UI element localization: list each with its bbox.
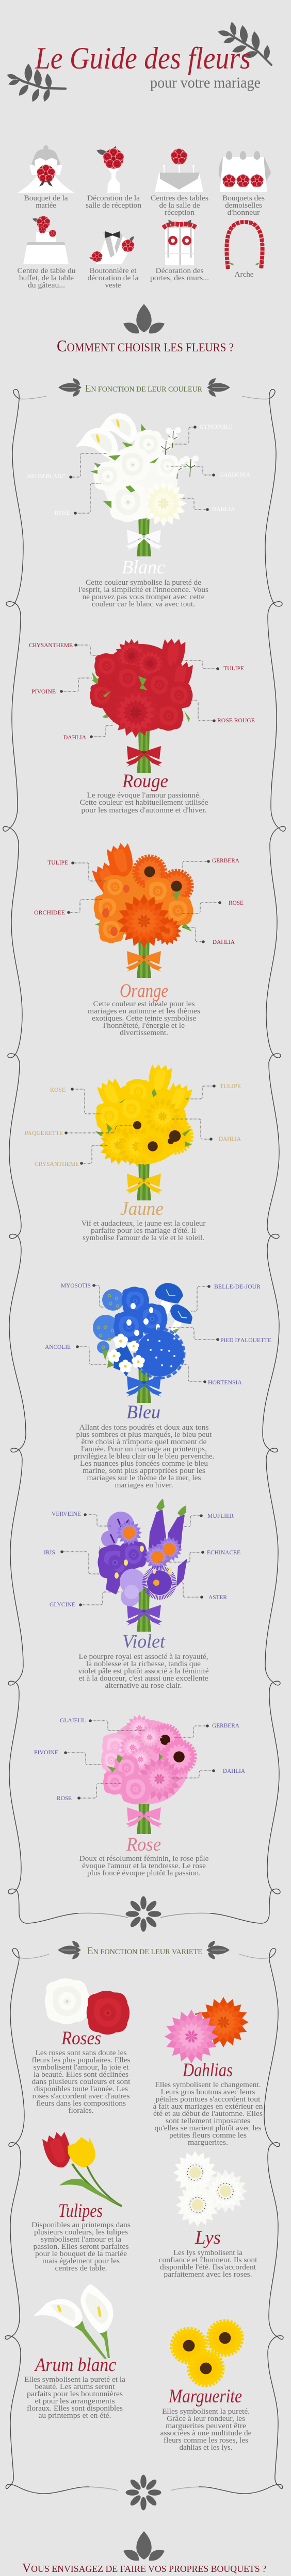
text: dahlias description: Elles symbolisent le changement. <box>155 2081 261 2089</box>
text: tulipes description: Disponibles au printemps dans <box>31 2221 131 2229</box>
text: roses description: symbolisent l'amour, la joie et <box>33 2063 129 2072</box>
label: glaieul: GLAIEUL <box>60 1718 86 1724</box>
caption: reception decoration: Décoration de la <box>87 194 140 202</box>
text: violet description <box>78 1653 208 1690</box>
text: bleu description: l'année. Pour un mariage au printemps, <box>81 1445 207 1453</box>
heading: how to choose: COMMENT CHOISIR LES FLEURS ? <box>57 336 234 355</box>
label: crysantheme: CRYSANTHEME <box>29 642 73 649</box>
text: marguerite description: Elles symbolisent la pureté. <box>162 2408 250 2416</box>
panel: arum blanc <box>24 2284 126 2420</box>
caption: table centrepiece: réception <box>165 209 195 217</box>
label: muflier <box>183 1513 234 1527</box>
label: gerbera <box>173 1723 240 1737</box>
text: jaune description: Vif et audacieux, le jaune est la couleur <box>82 1219 206 1228</box>
icon: blue bouquet drawing <box>93 1283 192 1403</box>
panel: marguerite <box>160 2319 252 2452</box>
label: muflier: MUFLIER <box>207 1513 234 1519</box>
icon: left leaf sprig <box>6 64 66 103</box>
decorative frame variety section left <box>5 1948 118 2494</box>
heading: rouge: Rouge <box>122 771 168 792</box>
label: tulipe: TULIPE <box>47 860 68 866</box>
text: lys description <box>159 2249 257 2279</box>
panel: yellow bouquet <box>25 1062 241 1242</box>
label: echinacee <box>158 1550 240 1562</box>
text: orange description: l'honnêteté, l'énergie et le <box>103 1022 185 1030</box>
panel: lys <box>159 2144 257 2279</box>
label: pivoine <box>34 1750 103 1765</box>
icon: white lilies <box>166 2144 254 2234</box>
text: orange description: Cette couleur est idéale pour les <box>93 1000 195 1008</box>
icon: right leaf sprig <box>217 21 271 65</box>
label: rose <box>182 900 244 913</box>
text: tulipes description <box>31 2221 131 2273</box>
label: gypsophile: GYPSOPHILE <box>200 424 232 430</box>
text: rouge description: Cette couleur est habituellement utilisée <box>79 799 208 807</box>
label: gerbera <box>183 858 240 872</box>
icon: left ornament variety <box>58 1941 81 1959</box>
icon: header leaves DIY <box>123 2531 165 2561</box>
caption: cake table: du gâteau... <box>28 281 65 290</box>
label: pivoine <box>31 678 92 695</box>
text: dahlias description <box>153 2081 263 2147</box>
text: dahlias description: sont tellement imposantes <box>166 2117 250 2125</box>
heading: DIY bouquets: VOUS ENVISAGEZ DE FAIRE VOS PROPRES BOUQUETS ? <box>22 2562 266 2575</box>
label: crysantheme: CRYSANTHEME <box>35 1161 79 1167</box>
label: pied d'alouette <box>169 1328 271 1344</box>
text: rose description: plus foncé évoque plutôt la passion. <box>87 1869 201 1877</box>
label: rose: ROSE <box>57 1795 72 1802</box>
text: bleu description <box>73 1423 214 1489</box>
icon: pink bouquet drawing <box>101 1710 197 1834</box>
text: bleu description: marine, sont plus appropriées pour les <box>83 1467 205 1475</box>
label: belle-de-jour: BELLE-DE-JOUR <box>214 1284 261 1290</box>
text: jaune description: symbolise l'amour de la vie et le soleil. <box>83 1234 204 1242</box>
caption: boutonniere and jacket <box>88 267 139 290</box>
label: tulipe: TULIPE <box>223 666 244 672</box>
panel: white bouquet <box>27 413 251 608</box>
caption: cake table <box>18 267 75 290</box>
text: tulipes description: plusieurs couleurs, les tulipes <box>34 2228 128 2236</box>
label: myosotis: MYOSOTIS <box>61 1283 91 1289</box>
caption: table centrepiece <box>151 194 208 217</box>
label: rose rouge <box>192 700 255 724</box>
text: dahlias description: été et au début de l'automne. Elles <box>153 2110 263 2118</box>
subheading: by variety: EN FONCTION DE LEUR VARIETE <box>87 1945 202 1957</box>
panel: red bouquet <box>29 634 255 815</box>
caption: bridesmaids bouquets <box>222 194 265 217</box>
text: lys description: Les lys symbolisent la <box>173 2249 243 2257</box>
text: dahlias description: marguerites. <box>188 2139 228 2147</box>
text: blanc description: ne pouvez pas vous tromper avec cette <box>83 593 204 601</box>
heading: lys: Lys <box>195 2227 221 2248</box>
text: marguerite description: associées à une multitude de <box>160 2429 252 2437</box>
caption: reception decoration <box>86 194 142 210</box>
label: rose: ROSE <box>55 510 70 516</box>
label: verveine <box>52 1511 111 1526</box>
icon: daisies <box>170 2319 244 2387</box>
caption: door decoration: Décoration des <box>156 267 204 275</box>
heading: arum blanc: Arum blanc <box>34 2354 117 2376</box>
heading: bleu: Bleu <box>126 1402 160 1423</box>
text: roses description: Les roses sont sans doute les <box>35 2049 127 2057</box>
text: orange description: exotiques. Cette teinte symbolise <box>92 1014 196 1023</box>
caption: cake table: Centre de table du <box>18 267 75 275</box>
label: iris: IRIS <box>44 1550 55 1556</box>
text: marguerite description <box>160 2408 252 2452</box>
panel: dahlias <box>153 1989 263 2147</box>
label: gardenia: GARDENIA <box>219 472 251 478</box>
caption: arch: Arche <box>234 270 254 279</box>
text: marguerite description: Grâce à leur rondeur, les <box>167 2415 245 2423</box>
icon: violet bouquet drawing <box>98 1499 187 1632</box>
caption: bride bouquet: Bouquet de la <box>24 194 68 202</box>
label: tulipe: TULIPE <box>220 1083 241 1090</box>
text: jaune description: parfaite pour les mariage d'été. Il <box>91 1227 196 1235</box>
decorative frame colour section left <box>3 389 128 1923</box>
label: dahlia: DAHLIA <box>213 939 235 945</box>
label: crysantheme <box>29 642 115 655</box>
label: glycine <box>50 1592 122 1608</box>
text: lys description: parfaitement avec les roses. <box>164 2270 252 2279</box>
label: crysantheme <box>35 1145 108 1167</box>
text: dahlias description: petites fleurs comme les <box>169 2131 247 2140</box>
label: paquerette <box>25 1126 133 1137</box>
text: dahlias description: qu'elles se marient plutôt avec les <box>155 2124 262 2132</box>
label: iris <box>44 1550 99 1574</box>
text: marguerite description: marguerites peuvent être <box>166 2422 246 2430</box>
panel: pink bouquet <box>34 1710 246 1877</box>
text: rose description: Doux et résolument féminin, le rose pâle <box>79 1855 208 1863</box>
caption: door decoration: portes, des murs... <box>150 274 209 282</box>
icon: white and red roses <box>45 1978 130 2035</box>
label: myosotis <box>61 1283 106 1307</box>
text: dahlias description: Leurs gros boutons avec leurs <box>161 2088 255 2096</box>
text: bleu description: Les nuances plus foncées comme le bleu <box>80 1460 208 1468</box>
text: blanc description: Cette couleur symbolise la pureté de <box>86 579 201 587</box>
label: arum blanc: ARUM BLANC <box>27 473 66 480</box>
panel: tulipes <box>31 2130 131 2273</box>
icon: flower divider <box>125 1896 161 1932</box>
heading: rose: Rose <box>126 1834 161 1855</box>
text: blanc description: couleur car le blanc va avec tout. <box>92 600 195 608</box>
text: tulipes description: passion. Elles seront parfaites <box>33 2243 129 2251</box>
caption: door decoration <box>150 267 209 282</box>
text: arum description: et pour les arrangements <box>35 2397 115 2405</box>
icon: orange bouquet drawing <box>90 841 193 978</box>
caption: bridesmaids bouquets: d'honneur <box>227 209 260 217</box>
label: pivoine: PIVOINE <box>31 689 56 695</box>
label: rose rouge: ROSE ROUGE <box>217 718 255 724</box>
text: rose description <box>79 1855 208 1877</box>
text: marguerite description: fleurs comme les roses, les <box>164 2436 248 2445</box>
caption: boutonniere and jacket: Boutonnière et <box>90 267 136 275</box>
label: pivoine: PIVOINE <box>34 1750 58 1756</box>
label: glycine: GLYCINE <box>50 1602 75 1608</box>
caption: reception decoration: salle de réception <box>86 201 142 210</box>
icon: table centrepiece <box>155 148 203 192</box>
text: rouge description: pour les mariages d'automne et d'hiver. <box>82 806 206 815</box>
text: roses description: dans plusieurs couleurs et sont <box>32 2078 130 2086</box>
heading: violet: Violet <box>122 1631 166 1652</box>
subtitle: pour votre mariage <box>150 74 261 91</box>
label: tulipe <box>180 660 244 672</box>
label: belle-de-jour <box>191 1284 261 1311</box>
text: bleu description: plus sombres et plus marqués, le bleu peut <box>76 1431 212 1439</box>
label: dahlia: DAHLIA <box>63 735 87 741</box>
label: rose: ROSE <box>50 1087 66 1093</box>
label: orchidee: ORCHIDEE <box>34 910 65 916</box>
text: dahlias description: à fait aux mariages en extérieur en <box>153 2103 263 2111</box>
label: dahlia: DAHLIA <box>223 1768 246 1774</box>
label: rose <box>55 483 101 516</box>
caption: bridesmaids bouquets: demoiselles <box>225 201 262 210</box>
icon: door decoration <box>163 219 197 265</box>
text: rouge description <box>79 791 208 815</box>
decorative frame colour section right <box>160 389 285 1923</box>
text: bleu description: Allant des tons poudrés et doux aux tons <box>79 1423 209 1432</box>
icon: boutonniere and jacket <box>89 231 135 264</box>
text: bleu description: privilégiez le bleu clair ou le bleu pervenche. <box>73 1452 214 1461</box>
heading: orange: Orange <box>120 980 168 1002</box>
caption: boutonniere and jacket: veste <box>105 281 121 290</box>
panel: roses <box>32 1978 131 2115</box>
text: marguerite description: dahlias et les lys. <box>180 2444 232 2452</box>
text: jaune description <box>82 1219 206 1242</box>
text: lys description: disponible l'été. Ilss'accordent <box>160 2263 256 2272</box>
icon: cake table <box>23 216 69 264</box>
text: bleu description: être choisi à n'importe quel moment de <box>82 1438 206 1446</box>
decorative frame variety section right <box>171 1948 283 2494</box>
icon: header leaves <box>123 304 165 333</box>
label: ancolie: ANCOLIE <box>45 1344 71 1350</box>
icon: right ornament variety <box>206 1941 230 1959</box>
icon: calla lilies <box>33 2284 113 2359</box>
caption: table centrepiece: Centres des tables <box>151 194 208 202</box>
text: orange description <box>88 1000 200 1037</box>
label: dahlia <box>63 725 113 741</box>
label: dahlia: DAHLIA <box>219 1136 241 1142</box>
label: hortensia: HORTENSIA <box>208 1380 242 1386</box>
label: glaieul <box>60 1718 145 1731</box>
text: arum description <box>24 2376 126 2420</box>
text: roses description: la beauté. Elles sont déclinées <box>34 2071 128 2079</box>
label: hortensia <box>181 1364 242 1386</box>
text: violet description: la noblesse et la richesse, tandis que <box>86 1660 201 1668</box>
heading: tulipes: Tulipes <box>58 2200 103 2222</box>
caption: table centrepiece: de la salle de <box>159 201 200 210</box>
label: tulipe <box>185 1083 241 1099</box>
label: dahlia <box>171 1768 246 1778</box>
label: pied d'alouette: PIED D'ALOUETTE <box>220 1337 271 1344</box>
text: violet description: Le pourpre royal est associé à la royauté, <box>78 1653 208 1661</box>
icon: bridesmaids bouquets <box>219 151 271 192</box>
caption: bride bouquet <box>24 194 68 210</box>
heading: dahlias: Dahlias <box>182 2060 233 2081</box>
label: gerbera: GERBERA <box>212 1723 240 1729</box>
label: gerbera: GERBERA <box>212 858 240 864</box>
caption: bride bouquet: mariée <box>36 201 56 210</box>
text: blanc description: l'esprit, la simplicité et l'innocence. Vous <box>78 586 208 594</box>
text: arum description: Elles symbolisent la pureté et la <box>24 2376 126 2384</box>
heading: marguerite: Marguerite <box>168 2386 242 2407</box>
icon: flower arch <box>227 222 263 269</box>
icon: red and yellow tulips <box>40 2130 122 2206</box>
label: paquerette: PAQUERETTE <box>25 1130 63 1137</box>
label: gardenia <box>170 466 251 478</box>
icon: orange and pink dahlias <box>156 1989 256 2072</box>
label: orchidee <box>34 900 103 916</box>
heading: blanc: Blanc <box>122 557 166 578</box>
label: rose <box>50 1087 102 1114</box>
text: orange description: mariages en automne et les thèmes <box>88 1007 200 1015</box>
text: bleu description: mariages sur le thème de la mer, les <box>87 1474 201 1482</box>
text: roses description <box>32 2049 131 2115</box>
icon: bride bouquet <box>18 145 74 193</box>
label: dahlia <box>180 498 235 513</box>
panel: violet bouquet <box>44 1499 240 1690</box>
text: lys description: confiance et l'honneur. Ils sont <box>159 2256 257 2264</box>
panel: orange bouquet <box>34 841 244 1037</box>
text: tulipes description: symbolisent l'amour et la <box>41 2235 122 2244</box>
label: aster: ASTER <box>208 1595 227 1601</box>
text: roses description: florales. <box>68 2107 94 2115</box>
label: dahlia <box>183 927 235 945</box>
heading: jaune: Jaune <box>120 1198 164 1219</box>
icon: yellow bouquet drawing <box>93 1062 193 1200</box>
text: roses description: disponibles toute l'année. Les <box>34 2085 128 2093</box>
text: arum description: floraux. Elles sont disponibles <box>27 2404 123 2413</box>
label: verveine: VERVEINE <box>52 1511 81 1517</box>
icon: right ornament colour <box>207 378 230 397</box>
panel: blue bouquet <box>45 1283 271 1489</box>
label: tulipe <box>47 860 108 881</box>
text: rouge description: Le rouge évoque l'amour passionné. <box>87 791 201 800</box>
text: rose description: évoque l'amour et la tendresse. Le rose <box>82 1862 206 1870</box>
caption: bridesmaids bouquets: Bouquets des <box>222 194 265 202</box>
text: tulipes description: centres de table. <box>55 2264 107 2273</box>
label: echinacee: ECHINACEE <box>207 1550 240 1556</box>
label: arum blanc <box>27 453 108 480</box>
subheading: by colour: EN FONCTION DE LEUR COULEUR <box>85 383 202 394</box>
label: ancolie <box>45 1344 109 1364</box>
heading: roses: Roses <box>61 2028 101 2049</box>
caption: boutonniere and jacket: décoration de la <box>88 274 139 282</box>
text: arum description: parfaits pour les boutonnières <box>27 2390 123 2398</box>
label: dahlia: DAHLIA <box>212 506 235 513</box>
icon: flower divider variety <box>125 2475 161 2511</box>
text: bleu description: mariages en hiver. <box>115 1481 173 1489</box>
label: dahlia <box>172 1119 241 1142</box>
text: roses description: roses s'accordent avec d'autres <box>32 2092 130 2100</box>
text: roses description: fleurs les plus populaires. Elles <box>32 2056 131 2064</box>
text: tulipes description: pour le bouquet de la mariée <box>35 2250 127 2258</box>
text: arum description: beauté. Les arums seront <box>35 2383 115 2391</box>
icon: white bouquet drawing <box>75 413 199 556</box>
title: Le Guide des fleurs <box>35 41 251 75</box>
label: gypsophile <box>173 424 232 444</box>
text: violet description: alternative au rose clair. <box>105 1682 182 1690</box>
text: violet description: et à la douceur, c'est aussi une excellente <box>78 1674 208 1683</box>
caption: cake table: buffet, de la table <box>19 274 74 282</box>
text: tulipes description: mais également pour les <box>42 2257 120 2265</box>
text: orange description: divertissement. <box>120 1029 168 1037</box>
label: rose: ROSE <box>229 900 244 906</box>
text: blanc description <box>78 579 208 608</box>
text: dahlias description: pétales pointues s'accordent tout <box>156 2095 260 2104</box>
label: aster <box>175 1582 227 1601</box>
icon: red bouquet drawing <box>90 634 194 773</box>
text: roses description: fleurs dans les compositions <box>36 2099 126 2108</box>
label: rose <box>57 1784 122 1802</box>
icon: reception decoration <box>95 145 124 193</box>
text: arum description: au printemps et en été. <box>38 2412 111 2420</box>
text: violet description: violet pâle est plutôt associé à la féminité <box>78 1667 208 1675</box>
icon: left ornament colour <box>58 378 82 397</box>
